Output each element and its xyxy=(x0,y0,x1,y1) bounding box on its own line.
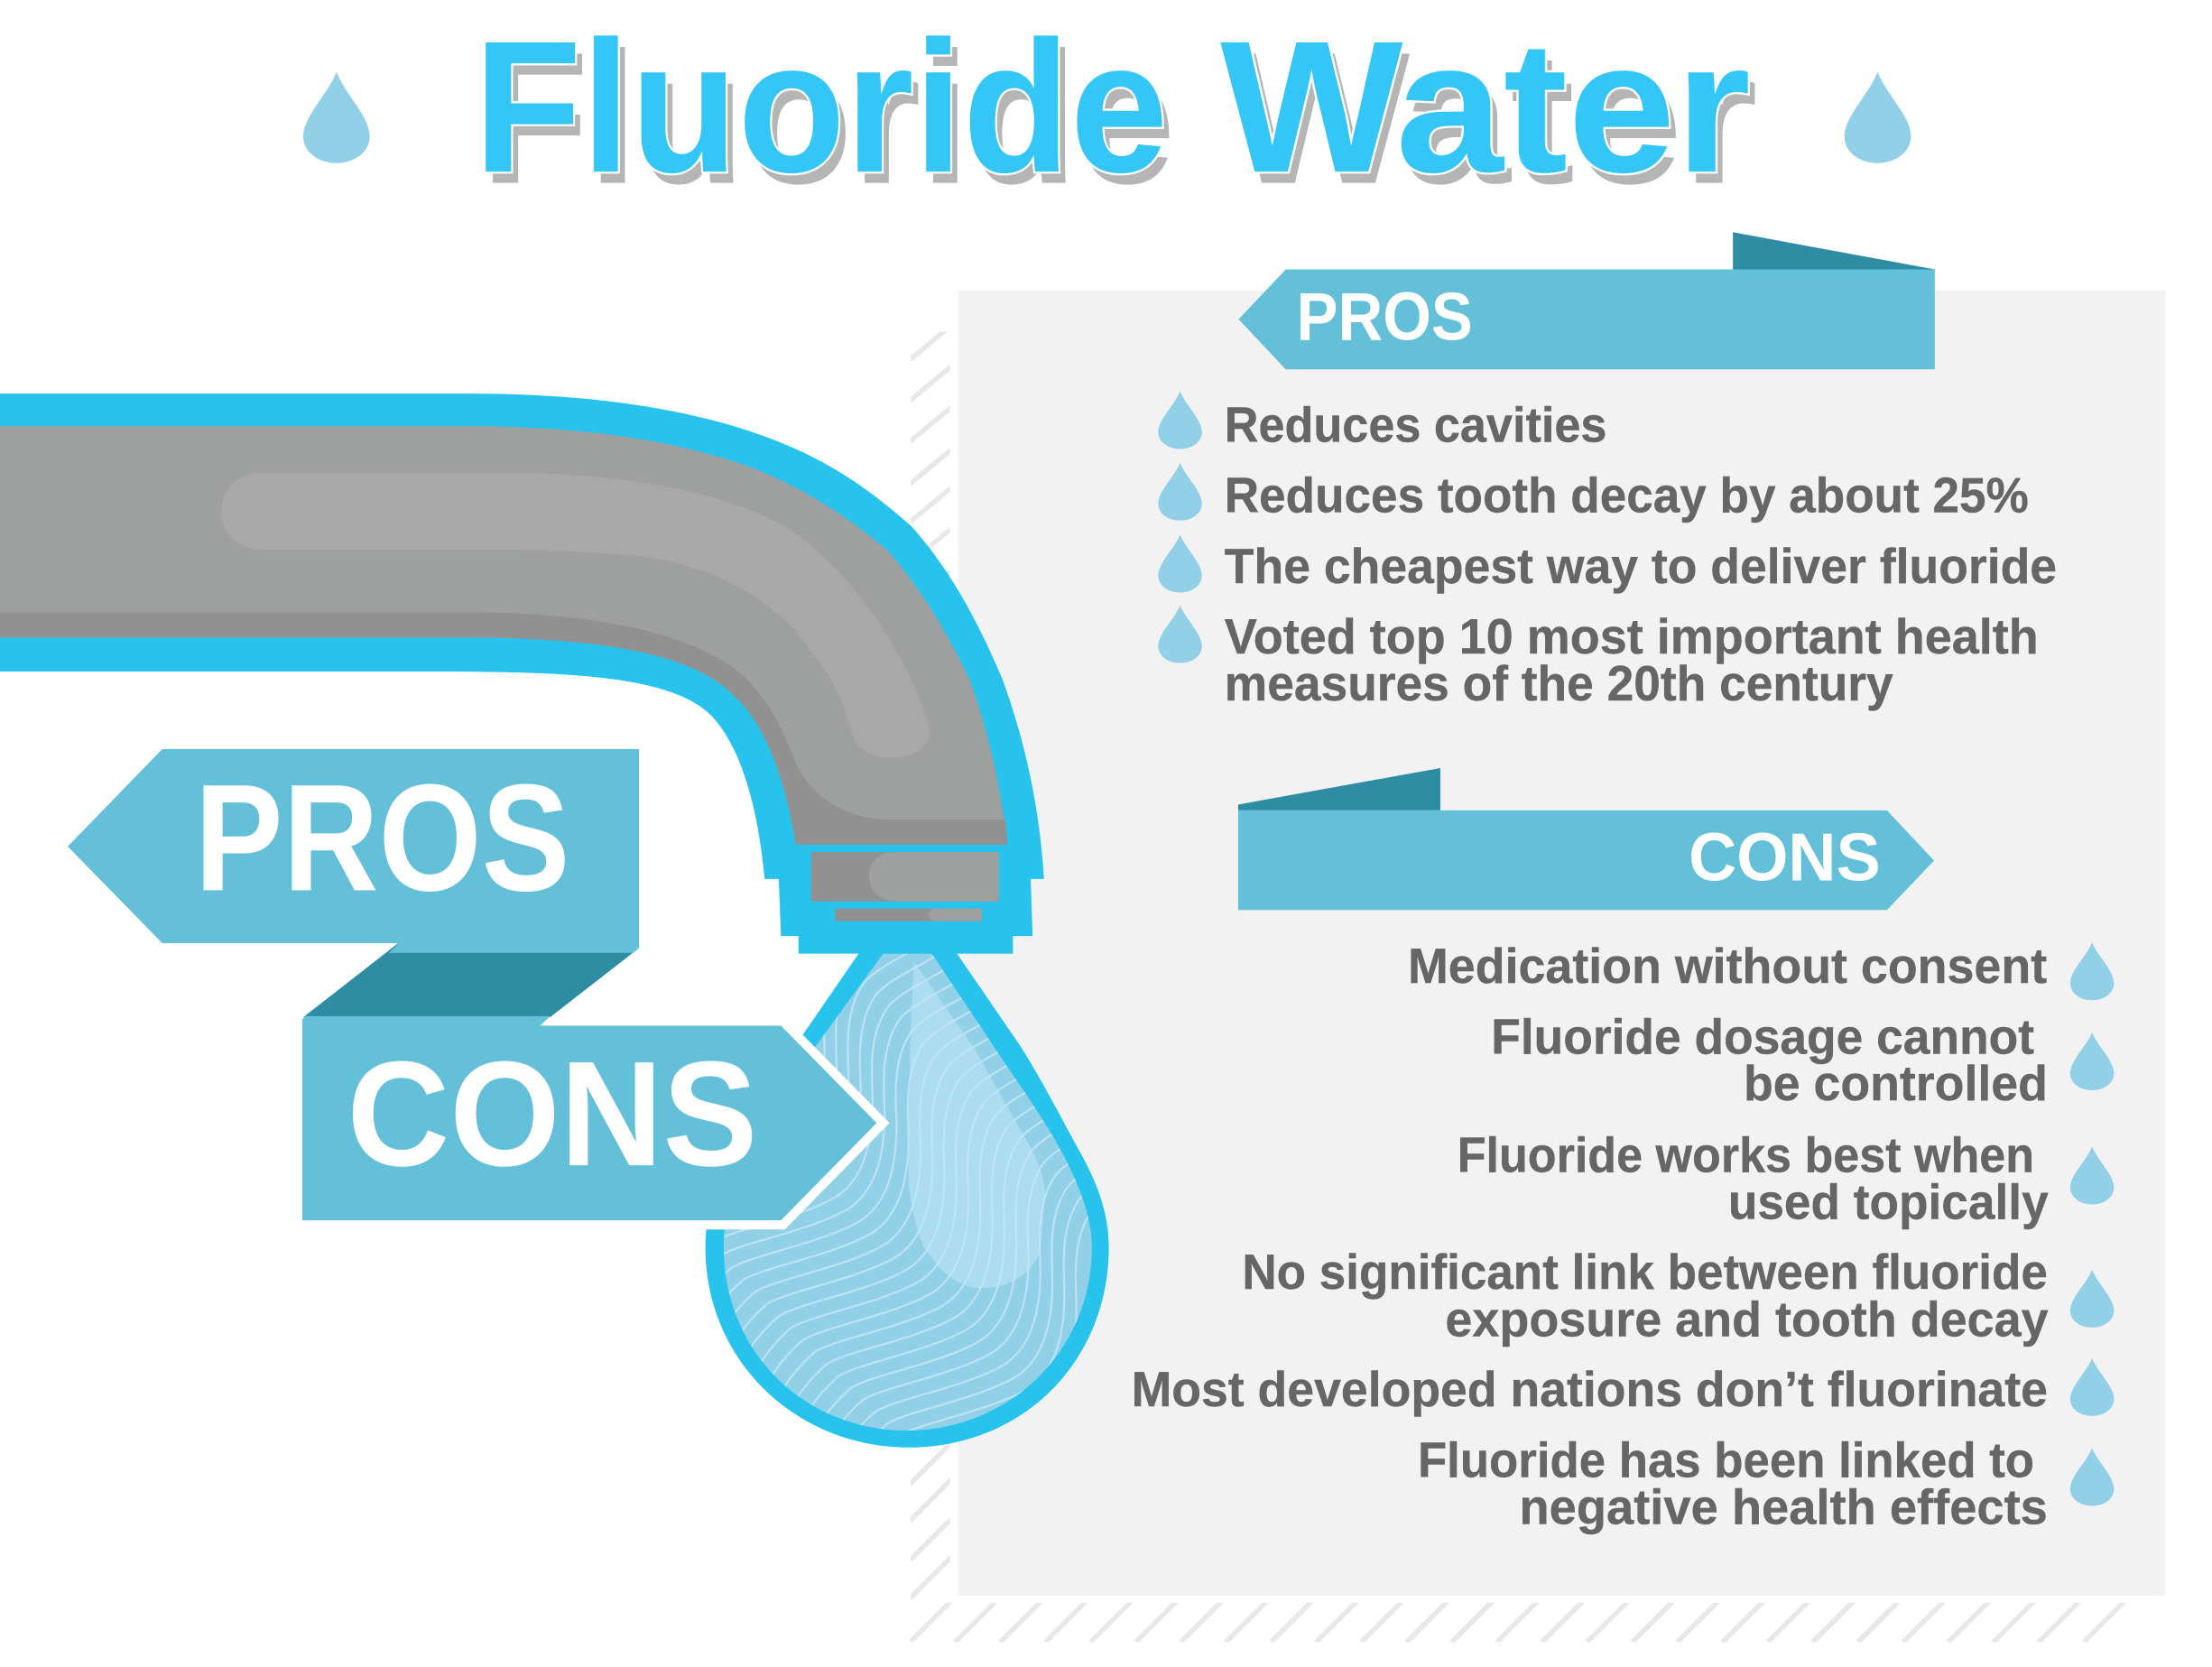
pro item: Reduces tooth decay by about 25% xyxy=(1225,468,2029,523)
icon: bullet drop xyxy=(2070,942,2114,1000)
cons list xyxy=(1132,938,2114,1535)
icon: bullet drop xyxy=(2070,1146,2114,1204)
ribbon: pros heading xyxy=(1238,232,1935,369)
icon: title drop left xyxy=(303,72,370,163)
ribbon: large pros and cons xyxy=(68,749,876,1220)
large pros label: PROS xyxy=(195,752,570,922)
faucet pipe xyxy=(0,394,1044,954)
pro item: Reduces cavities xyxy=(1225,396,1606,452)
ribbon: cons heading xyxy=(1238,768,1934,910)
panel: grey background xyxy=(958,291,2165,1596)
icon: bullet drop xyxy=(1158,391,1202,449)
con item: Fluoride dosage cannot xyxy=(1491,1009,2034,1065)
icon: bullet drop xyxy=(2070,1270,2114,1328)
title: Water xyxy=(1220,3,1751,212)
con item: Medication without consent xyxy=(1408,938,2047,994)
pro item: The cheapest way to deliver fluoride xyxy=(1225,538,2057,594)
icon: bullet drop xyxy=(2070,1358,2114,1416)
water drop illustration xyxy=(706,953,1109,1448)
pro item continuation: measures of the 20th century xyxy=(1225,655,1893,711)
title: Water xyxy=(1227,14,1758,224)
icon: title drop right xyxy=(1845,72,1911,163)
title: Fluoride xyxy=(481,14,1175,224)
con item continuation: be controlled xyxy=(1744,1055,2048,1111)
pros heading text: PROS xyxy=(1297,279,1473,355)
pro item: Voted top 10 most important health xyxy=(1225,608,2039,664)
con item: Fluoride has been linked to xyxy=(1418,1432,2034,1488)
con item: Fluoride works best when xyxy=(1458,1127,2034,1183)
con item continuation: negative health effects xyxy=(1519,1479,2048,1535)
icon: bullet drop xyxy=(1158,534,1202,593)
con item continuation: exposure and tooth decay xyxy=(1445,1291,2049,1347)
icon: bullet drop xyxy=(2070,1448,2114,1505)
icon: bullet drop xyxy=(2070,1033,2114,1090)
con item: No significant link between fluoride xyxy=(1242,1244,2048,1300)
con item: Most developed nations don’t fluorinate xyxy=(1132,1361,2048,1417)
title: Fluoride xyxy=(474,3,1168,212)
cons heading text: CONS xyxy=(1689,819,1881,894)
title xyxy=(474,3,1758,224)
con item continuation: used topically xyxy=(1728,1174,2049,1230)
pros list xyxy=(1158,391,2057,711)
icon: bullet drop xyxy=(1158,463,1202,521)
large cons label: CONS xyxy=(347,1031,757,1198)
icon: bullet drop xyxy=(1158,606,1202,663)
